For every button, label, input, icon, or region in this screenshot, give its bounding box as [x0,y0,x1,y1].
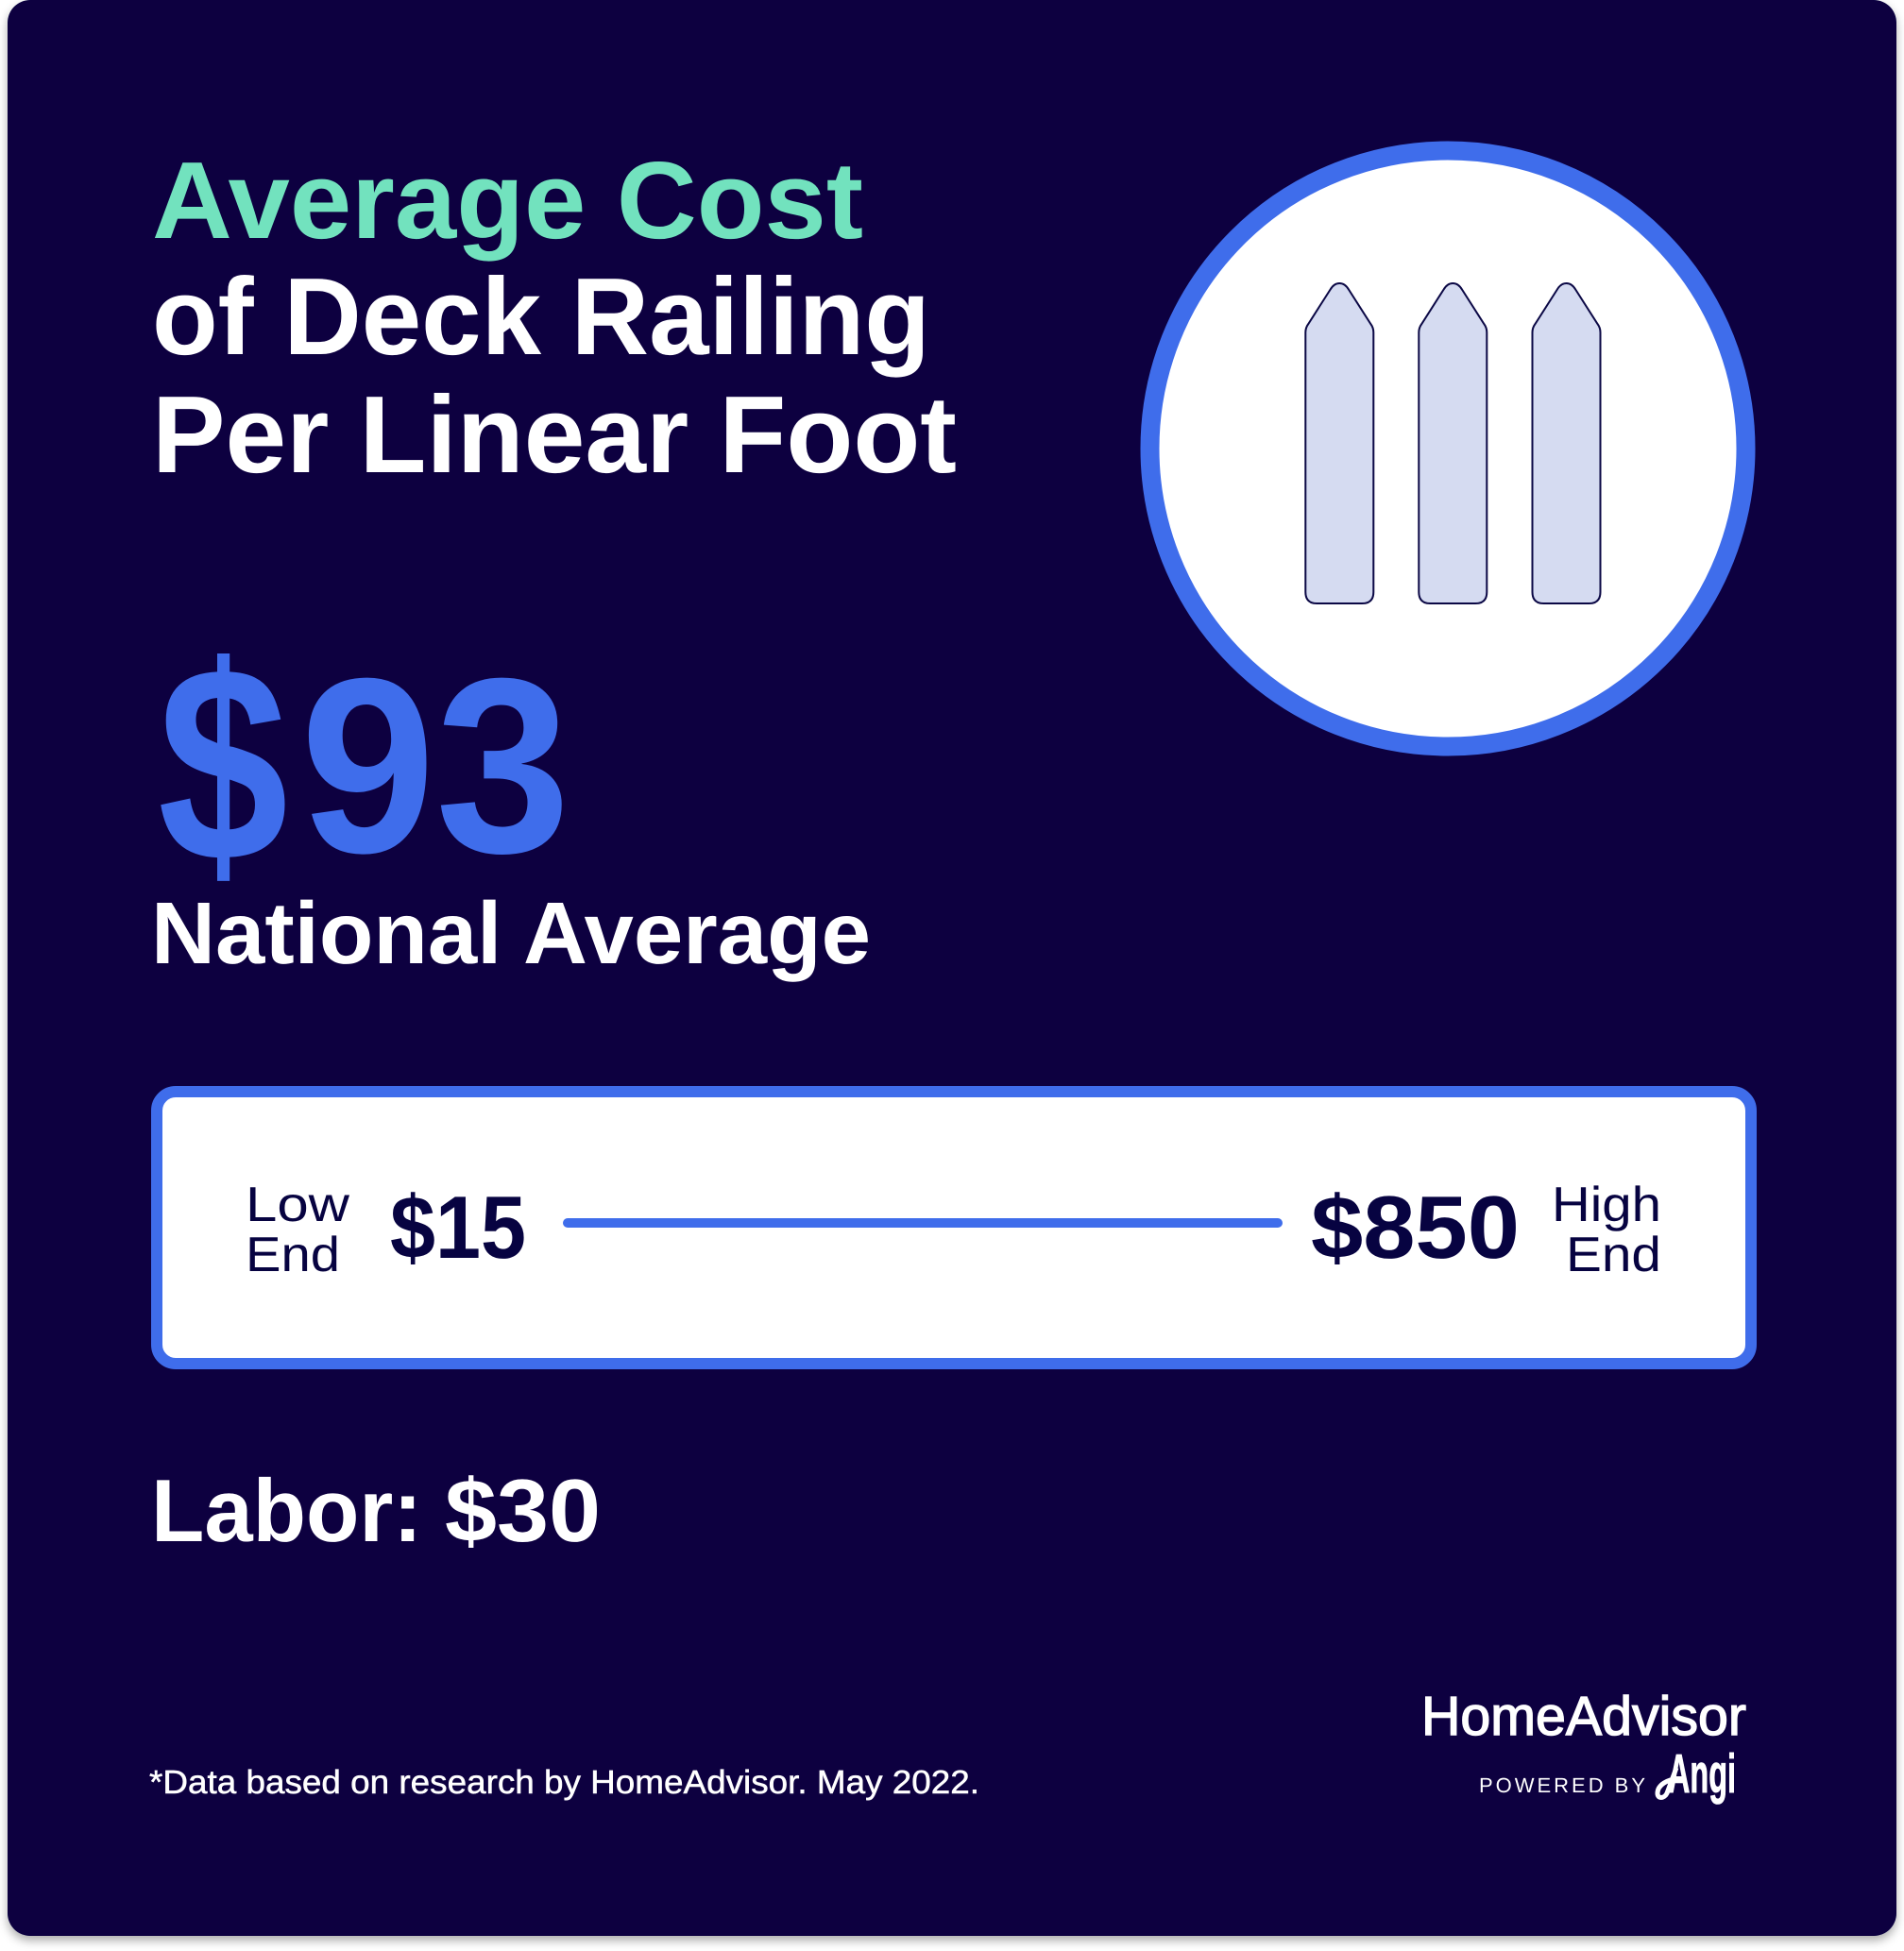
title [152,139,957,496]
title line: Average Cost: Average Cost [152,139,863,262]
high end label [1552,1178,1661,1282]
logo: HomeAdvisor powered by Angi [1421,1686,1746,1805]
national average price: 93 [300,626,570,905]
range card [157,1092,1751,1364]
national average price: $ [158,608,288,920]
panel: cost range [157,1092,1751,1364]
low end label: End [246,1228,340,1282]
national average label: National Average [151,884,871,982]
powered by: POWERED BY [1479,1773,1645,1797]
labor cost: Labor: [151,1461,422,1560]
picket right [1532,283,1600,603]
wordmark: Angi: Angi [1668,1743,1736,1805]
low end label [246,1178,349,1282]
picket middle [1419,283,1487,603]
icon circle [1150,151,1745,746]
high end label: End [1566,1228,1661,1282]
low end label: Low [246,1178,349,1232]
title line: Per Linear Foot: Per Linear Foot [152,373,957,496]
high end label: High [1552,1178,1661,1232]
icon: deck railing in circle [1150,151,1745,746]
low price: $15 [390,1178,526,1277]
swash of Angi A [1658,1768,1677,1798]
picket left [1305,283,1373,603]
wordmark: HomeAdvisor: HomeAdvisor [1421,1686,1746,1747]
range line [563,1218,1283,1228]
title line: of Deck Railing: of Deck Railing [152,255,930,378]
labor cost [151,1461,601,1560]
footnote: *Data based on research by HomeAdvisor. May 2022. [149,1764,979,1801]
labor cost: $30 [445,1461,601,1560]
high price: $850 [1311,1178,1520,1277]
national average price [158,608,570,920]
